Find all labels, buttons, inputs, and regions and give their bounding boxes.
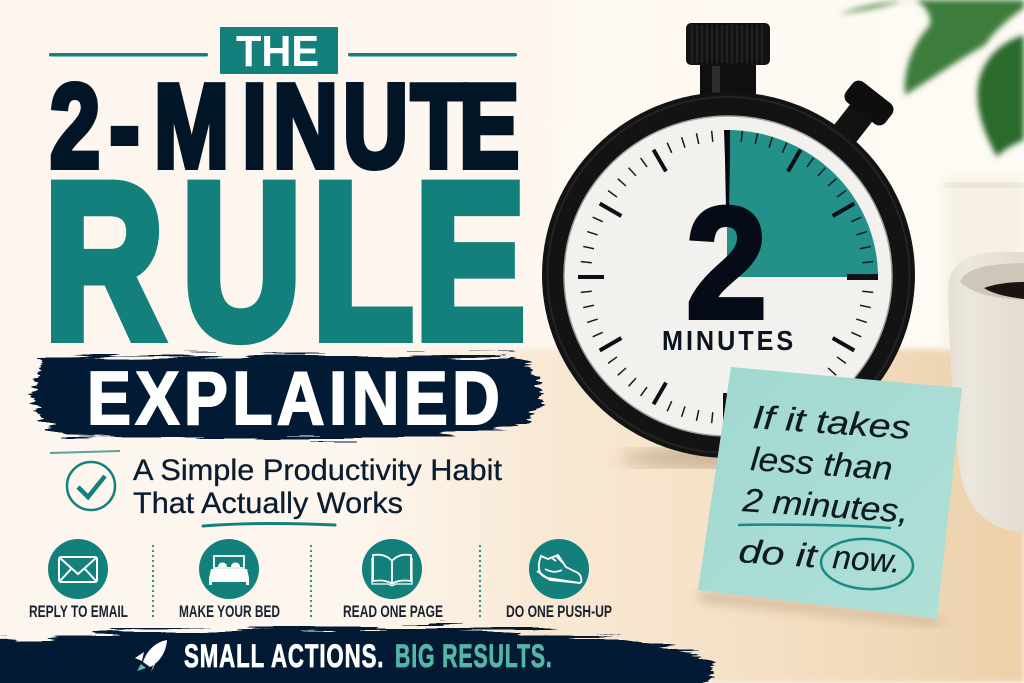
icon: bed	[209, 556, 249, 585]
brush stroke	[34, 355, 540, 439]
title rule right	[348, 53, 517, 56]
icon: rocket	[135, 640, 167, 672]
note text: If it takes	[752, 398, 912, 446]
action: make your bed	[179, 539, 280, 621]
icon: envelope	[59, 557, 97, 582]
shelf shadow	[945, 183, 1024, 187]
icon: check mark	[67, 462, 115, 510]
icon: book	[372, 555, 412, 586]
explained banner	[34, 355, 540, 440]
subtitle text: A Simple Productivity Habit	[133, 454, 503, 487]
icon: crown	[686, 23, 770, 98]
action: reply to email	[29, 539, 128, 621]
tagline teal: BIG RESULTS.	[395, 638, 553, 674]
coffee cup	[948, 252, 1024, 533]
note text: now.	[832, 538, 902, 580]
dotted separators	[153, 545, 480, 617]
2-minute heading: 2-MINUTE	[50, 60, 519, 193]
stopwatch	[542, 23, 915, 458]
plant leaves	[840, 0, 1024, 157]
title	[44, 27, 525, 385]
title rule left	[49, 53, 208, 56]
bottom banner	[0, 627, 712, 683]
label: DO ONE PUSH-UP	[506, 602, 612, 621]
big number 2: 2	[686, 176, 767, 352]
note circle around now	[820, 537, 914, 591]
minutes label: MINUTES	[662, 325, 796, 356]
the badge: THE	[236, 27, 319, 76]
sticky note	[698, 367, 962, 625]
subtitle underline	[203, 524, 335, 526]
stopwatch body	[542, 92, 915, 458]
rule heading: RULE	[44, 139, 525, 385]
subtitle with check icon	[50, 451, 503, 526]
note text	[738, 398, 912, 580]
note text: less than	[750, 440, 894, 487]
label: MAKE YOUR BED	[179, 602, 280, 621]
note text: 2 minutes,	[740, 481, 910, 530]
subtitle with check icon: That Actually Works	[133, 487, 403, 520]
clock shadow on table	[620, 449, 810, 467]
action: read one page	[343, 539, 443, 621]
brush stroke	[0, 627, 712, 683]
minute ticks	[581, 131, 873, 423]
icon: sneaker	[537, 555, 581, 583]
label: READ ONE PAGE	[343, 602, 443, 621]
accent stroke above check	[50, 451, 120, 453]
clock hand	[724, 130, 730, 209]
icon: side button	[820, 77, 897, 155]
tagline white: SMALL ACTIONS.	[184, 638, 384, 674]
explained text: EXPLAINED	[87, 356, 504, 440]
action: do one push-up	[506, 539, 612, 621]
hour ticks	[578, 150, 878, 422]
note underline	[739, 525, 890, 528]
note text: do it	[738, 532, 820, 575]
teal two-minute wedge	[727, 130, 878, 277]
clock face	[564, 116, 892, 436]
label: REPLY TO EMAIL	[29, 602, 128, 621]
